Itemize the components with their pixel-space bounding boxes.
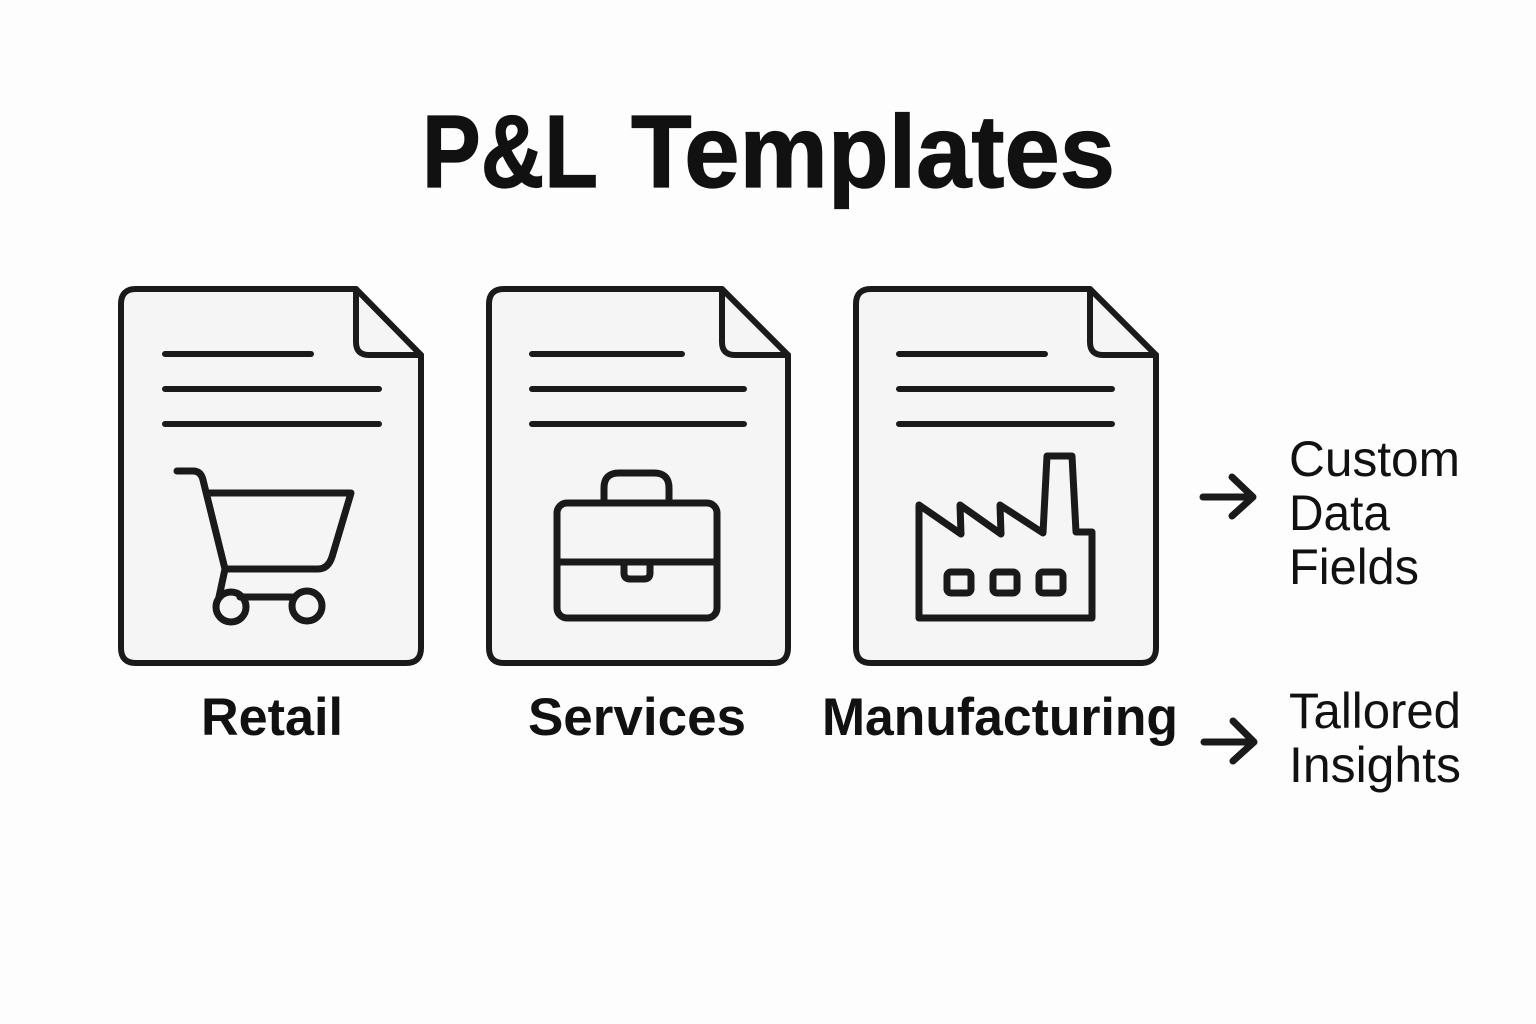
title: P&L — [422, 94, 598, 209]
text: tailored insights: Insights — [1289, 737, 1461, 793]
icon: briefcase — [557, 473, 717, 618]
text: custom data fields: Fields — [1289, 539, 1419, 595]
panel: services document — [489, 289, 788, 663]
text: tailored insights: Tallored — [1289, 683, 1461, 739]
icon: factory — [919, 456, 1092, 618]
text: tailored insights — [1289, 683, 1461, 793]
label: services: Services — [528, 688, 746, 747]
panel: manufacturing document — [856, 289, 1156, 663]
label: manufacturing: Manufacturing — [822, 688, 1178, 747]
icon: shopping cart — [177, 471, 351, 622]
text: custom data fields: Custom — [1289, 431, 1460, 487]
panel: retail document — [121, 289, 421, 663]
arrow: to custom data fields — [1203, 477, 1253, 516]
label: retail: Retail — [201, 688, 343, 747]
arrow: to tailored insights — [1204, 721, 1254, 761]
text: custom data fields: Data — [1289, 485, 1390, 541]
text: custom data fields — [1289, 431, 1460, 595]
title: Templates — [631, 94, 1115, 209]
title — [422, 94, 1115, 209]
